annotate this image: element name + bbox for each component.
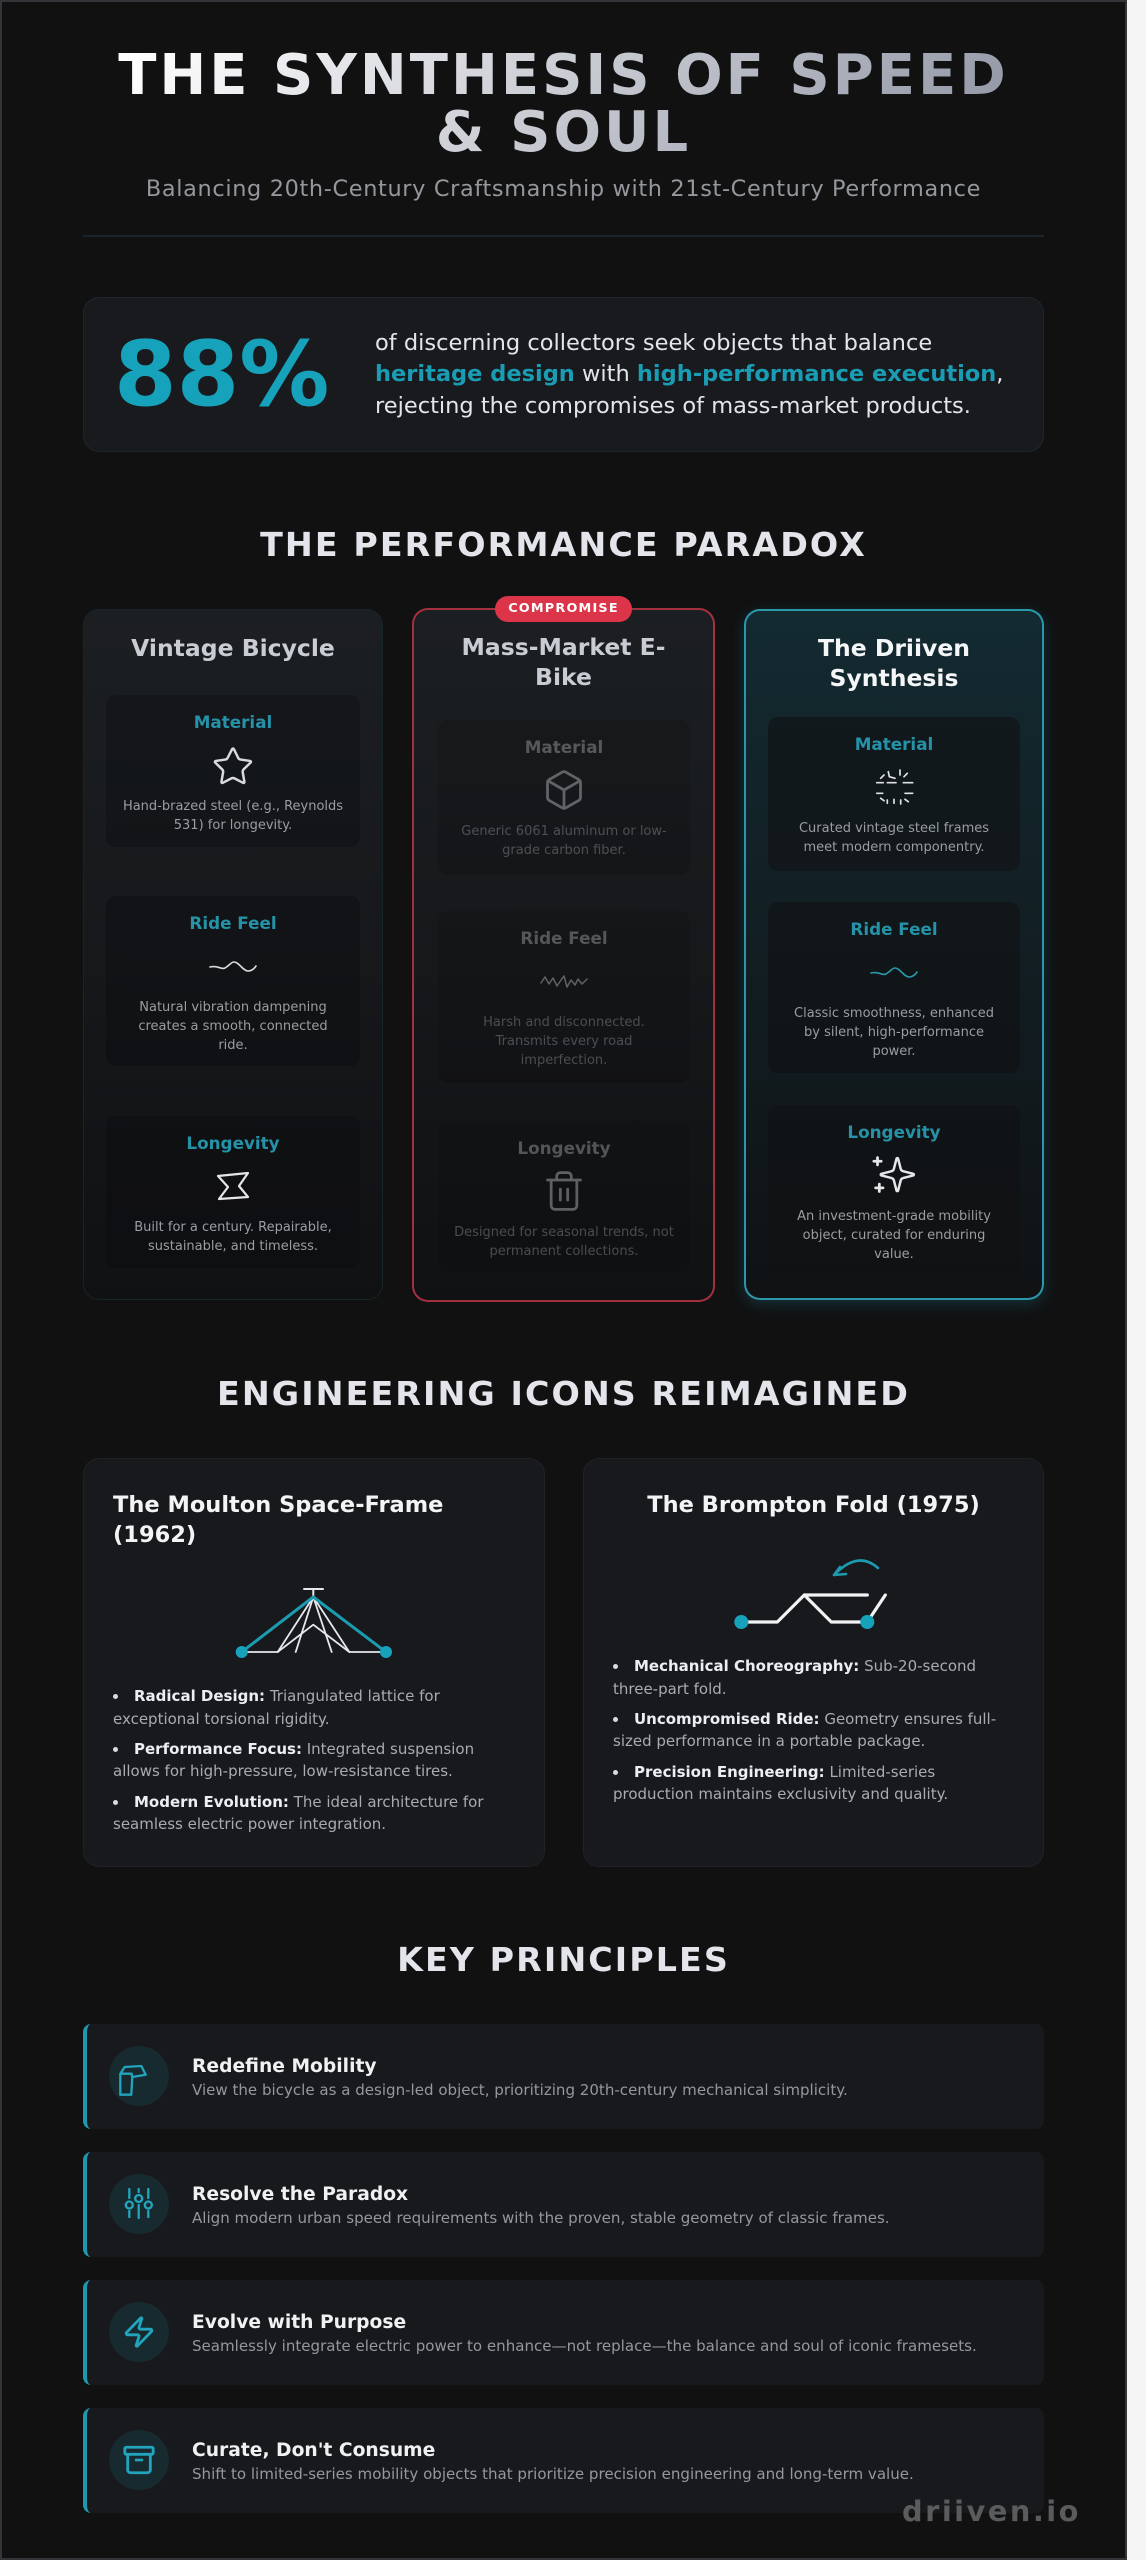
block: longevity: An investment-grade mobility [797, 1208, 991, 1224]
block: longevity: permanent collections. [490, 1244, 638, 1259]
moulton bullet list: Performance Focus: Integrated suspension allows for high-pressure, low-resistance tires. [113, 1740, 474, 1780]
icon: box [546, 770, 582, 810]
block: ride feel: by silent, high-performance [804, 1025, 984, 1040]
block: material: Curated vintage steel frames [799, 820, 989, 836]
icon: trash [546, 1171, 582, 1211]
block: ride feel: imperfection. [521, 1053, 607, 1068]
block: material [106, 695, 360, 847]
title [83, 47, 1044, 161]
panel: hero statistic [83, 297, 1044, 452]
icon: lightning bolt [109, 2302, 169, 2362]
block: longevity: value. [874, 1247, 914, 1262]
watermark: driiven.io [902, 2494, 1081, 2528]
icon: archive box [109, 2430, 169, 2490]
block: ride feel: ride. [218, 1038, 248, 1053]
block: ride feel: Harsh and disconnected. [483, 1014, 645, 1030]
title: THE SYNTHESIS OF SPEED [118, 43, 1009, 108]
block: ride feel: Ride Feel [189, 912, 277, 932]
moulton heading: The Moulton Space-Frame (1962) [113, 1492, 443, 1548]
heading: engineering icons: ENGINEERING ICONS REIMAGINED [217, 1374, 910, 1413]
icon: teal wave [870, 967, 918, 978]
block: ride feel [106, 896, 360, 1066]
block: material: meet modern componentry. [803, 840, 985, 855]
panel: vintage bicycle [83, 609, 383, 1300]
block: material: grade carbon fiber. [502, 843, 626, 858]
icon: frame tube [109, 2046, 169, 2106]
block: longevity: Longevity [186, 1132, 280, 1152]
badge: compromise [495, 596, 632, 622]
block: material: Material [194, 712, 272, 732]
diagram: moulton space-frame [236, 1588, 392, 1658]
block: material: Material [855, 734, 933, 754]
block: longevity: Built for a century. Repairable, [134, 1220, 332, 1234]
block: ride feel [438, 911, 690, 1083]
brompton heading: The Brompton Fold (1975) [647, 1492, 980, 1518]
block: ride feel: power. [872, 1044, 916, 1059]
icon: radial ticks [876, 769, 914, 805]
principle: redefine mobility: Redefine Mobility [192, 2056, 377, 2077]
block: longevity [438, 1121, 690, 1273]
block: ride feel [768, 902, 1020, 1073]
badge: compromise: COMPROMISE [508, 601, 619, 616]
block: material [768, 717, 1020, 871]
principle: resolve the paradox: Align modern urban speed requirements with the proven, stable geometry of classic frames. [192, 2209, 890, 2227]
moulton bullet list: Radical Design: Triangulated lattice for exceptional torsional rigidity. [113, 1687, 440, 1728]
card heading: Mass-Market E- [462, 633, 665, 661]
principle: curate, don't consume [83, 2408, 1044, 2513]
principle: resolve the paradox [83, 2152, 1044, 2257]
block: material: Hand-brazed steel (e.g., Reynolds [123, 798, 343, 814]
card heading: Synthesis [830, 664, 958, 692]
principle: evolve with purpose: Seamlessly integrate electric power to enhance—not replace—the balance and soul of iconic framesets. [192, 2337, 977, 2355]
card heading [818, 634, 970, 692]
principle: curate, don't consume: Curate, Don't Consume [192, 2440, 435, 2461]
brompton bullet list [613, 1657, 996, 1803]
card heading: Bike [535, 663, 592, 691]
brompton bullet list: Mechanical Choreography: Sub-20-second three-part fold. [613, 1657, 976, 1698]
principle: evolve with purpose [83, 2280, 1044, 2385]
card heading [462, 633, 665, 691]
diagram: brompton fold [734, 1559, 887, 1629]
principle: resolve the paradox: Resolve the Paradox [192, 2184, 408, 2205]
principle: evolve with purpose: Evolve with Purpose [192, 2312, 406, 2333]
panel: brompton [583, 1458, 1044, 1867]
icon: smooth wave [209, 961, 257, 972]
icon: sparkles [872, 1156, 915, 1193]
moulton bullet list: Modern Evolution: The ideal architecture for seamless electric power integration. [113, 1793, 484, 1833]
statistic description: of discerning collectors seek objects that balance heritage design with high-performance execution, rejecting the compromises of mass-market products. [375, 330, 1003, 419]
block: longevity: Designed for seasonal trends, not [454, 1224, 674, 1240]
moulton bullet list [113, 1687, 484, 1833]
card heading: The Driiven [818, 634, 970, 662]
heading: key principles: KEY PRINCIPLES [397, 1940, 730, 1979]
icon: jagged wave [540, 975, 588, 988]
block: material: Generic 6061 aluminum or low- [461, 824, 667, 838]
block: ride feel: Ride Feel [850, 918, 938, 938]
principle: curate, don't consume: Shift to limited-series mobility objects that prioritize precision engineering and long-term value. [192, 2465, 914, 2483]
block: longevity: sustainable, and timeless. [148, 1239, 318, 1254]
icon: hourglass [216, 1172, 250, 1200]
brompton bullet list: Precision Engineering: Limited-series production maintains exclusivity and quality. [613, 1763, 948, 1803]
block: material [438, 720, 690, 875]
icon: sliders [109, 2174, 169, 2234]
panel: mass-market e-bike [412, 608, 715, 1302]
block: longevity [768, 1105, 1020, 1277]
block: ride feel: Ride Feel [520, 928, 608, 948]
block: ride feel: Transmits every road [496, 1034, 632, 1049]
panel: the driiven synthesis [744, 609, 1044, 1300]
block: ride feel: Classic smoothness, enhanced [794, 1006, 994, 1020]
block: longevity: object, curated for enduring [803, 1228, 985, 1243]
block: ride feel: Natural vibration dampening [139, 1000, 327, 1014]
block: ride feel: creates a smooth, connected [138, 1019, 328, 1034]
block: longevity: Longevity [847, 1122, 941, 1142]
panel: moulton [83, 1458, 545, 1867]
subtitle: Balancing 20th-Century Craftsmanship with 21st-Century Performance [146, 176, 981, 202]
block: longevity [106, 1116, 360, 1268]
heading: performance paradox: THE PERFORMANCE PARADOX [260, 525, 867, 564]
brompton bullet list: Uncompromised Ride: Geometry ensures full-sized performance in a portable package. [613, 1710, 996, 1750]
card heading: Vintage Bicycle [131, 634, 335, 662]
icon: star [214, 747, 252, 784]
big number: 88%: 88% [114, 322, 329, 427]
title: & SOUL [436, 100, 691, 165]
block: material: Material [525, 736, 603, 756]
principle: redefine mobility [83, 2024, 1044, 2129]
principle: redefine mobility: View the bicycle as a design-led object, prioritizing 20th-century mechanical simplicity. [192, 2081, 848, 2099]
block: longevity: Longevity [517, 1138, 611, 1158]
block: material: 531) for longevity. [174, 818, 292, 833]
